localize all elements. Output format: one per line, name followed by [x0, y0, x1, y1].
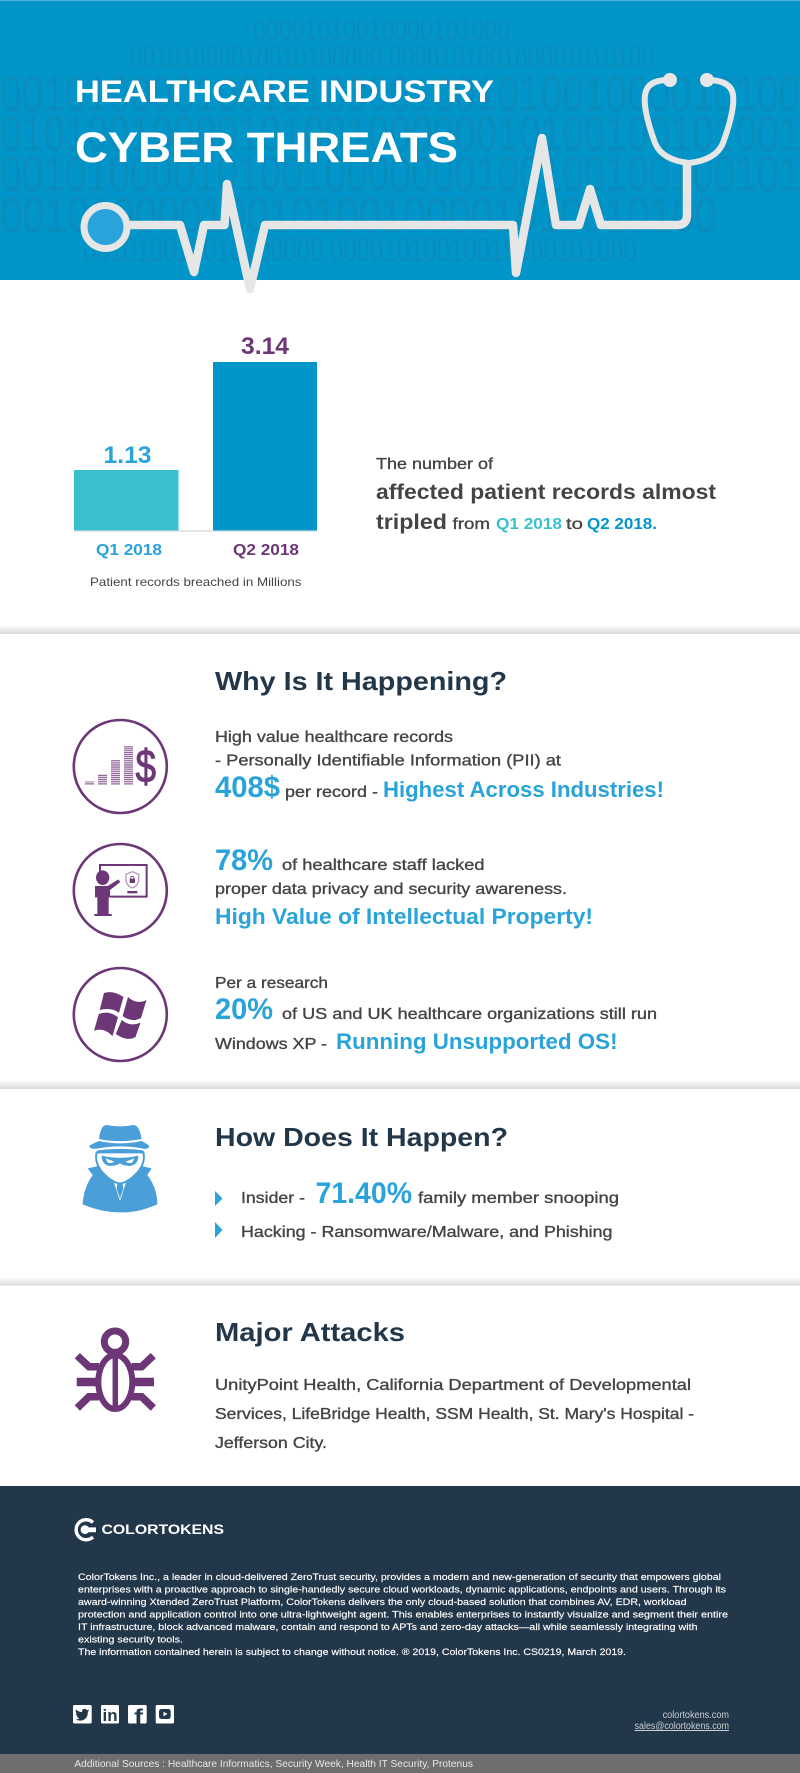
value: 1.13: 1.13	[104, 442, 152, 469]
attacks list text	[215, 1377, 694, 1452]
logo: colortokens	[76, 1520, 224, 1540]
icon: dollar value bars: $	[136, 740, 156, 792]
reason 1 text: Highest Across Industries!	[383, 777, 664, 802]
company description: enterprises with a proactive approach to single-handedly secure cloud workloads, dynamic applications, endpoints and users. Through its	[78, 1584, 726, 1595]
callout: records tripled: Q2 2018.	[587, 516, 657, 533]
logo: colortokens: COLORTOKENS	[102, 1522, 224, 1537]
panel: why is it happening	[74, 666, 664, 1061]
reason 3 text: 20%	[215, 993, 273, 1026]
heading: why is it happening: Why Is It Happening?	[215, 666, 507, 696]
icon: linkedin: in	[102, 1706, 118, 1725]
list: insider	[215, 1177, 619, 1210]
title: CYBER THREATS	[75, 124, 458, 172]
heading: major attacks: Major Attacks	[215, 1317, 405, 1347]
reason 1 text: High value healthcare records	[215, 729, 453, 746]
reason 3 text: of US and UK healthcare organizations still run	[282, 1006, 657, 1023]
icon: twitter	[73, 1705, 92, 1724]
heading: how does it happen: How Does It Happen?	[215, 1122, 508, 1152]
company description: protection and application control into one ultra-lightweight agent. This enables enterprises to instantly visualize and segment their entire	[78, 1609, 728, 1620]
attacks list text: Jefferson City.	[215, 1435, 327, 1452]
reason 3 text: Per a research	[215, 975, 328, 992]
binary background pattern: 00001010010000101000	[253, 14, 510, 47]
footer panel	[0, 1486, 800, 1754]
company description: ColorTokens Inc., a leader in cloud-delivered ZeroTrust security, provides a modern and new-generation of security that empowers global	[78, 1571, 721, 1582]
company description	[78, 1571, 728, 1657]
icon: bug	[77, 1331, 154, 1409]
reason 2 text: of healthcare staff lacked	[282, 857, 484, 874]
icon: spy	[83, 1125, 157, 1212]
binary background pattern	[0, 14, 800, 268]
reason 1 text: per record -	[285, 784, 378, 801]
contact details	[635, 1710, 729, 1732]
company description: IT infrastructure, block advanced malware, contain and respond to APTs and zero-day attacks—all while seamlessly integrating with	[78, 1621, 698, 1632]
reason 2 text	[215, 844, 593, 929]
label: Q2 2018: Q2 2018	[233, 542, 299, 559]
attacks list text: UnityPoint Health, California Department of Developmental	[215, 1377, 691, 1394]
icon: stethoscope heartbeat line	[84, 73, 733, 289]
icon: windows logo	[74, 968, 167, 1061]
icon: presenter at security board	[74, 844, 167, 937]
bar chart: patient records breached	[74, 333, 317, 589]
callout: records tripled: affected patient records almost	[376, 481, 716, 504]
list: insider: 71.40%	[316, 1177, 412, 1210]
title: HEALTHCARE INDUSTRY	[75, 73, 494, 109]
company description: award-winning Xtended ZeroTrust Platform, ColorTokens delivers the only cloud-based solution that combines AV, EDR, workload	[78, 1596, 686, 1607]
bar: Q2 2018	[213, 362, 317, 530]
list: insider: family member snooping	[418, 1190, 619, 1207]
chart caption: Patient records breached in Millions	[90, 575, 302, 589]
reason 3 text	[215, 975, 657, 1054]
panel: major attacks	[77, 1317, 694, 1452]
bar: Q1 2018	[74, 470, 178, 530]
callout: records tripled: tripled	[376, 511, 447, 534]
list: insider: Insider -	[241, 1190, 305, 1207]
reason 1 text: - Personally Identifiable Information (PII) at	[215, 752, 562, 770]
icon: youtube	[156, 1705, 174, 1724]
icon: facebook: f	[134, 1706, 143, 1728]
callout: records tripled	[376, 456, 716, 534]
list: hacking: Hacking - Ransomware/Malware, and Phishing	[241, 1224, 612, 1241]
company description: The information contained herein is subject to change without notice. ® 2019, ColorTokens Inc. CS0219, March 2019.	[78, 1646, 626, 1657]
reason 2 text: proper data privacy and security awareness.	[215, 881, 567, 898]
panel: how does it happen	[83, 1122, 619, 1241]
sources bar	[0, 1754, 800, 1773]
company description: existing security tools.	[78, 1634, 183, 1645]
reason 2 text: 78%	[215, 844, 273, 877]
callout: records tripled: from	[452, 516, 490, 533]
reason 3 text: Running Unsupported OS!	[336, 1029, 618, 1054]
title	[75, 73, 494, 172]
reason 1 text	[215, 729, 664, 804]
header banner	[0, 0, 800, 280]
reason 1 text: 408$	[215, 771, 280, 804]
callout: records tripled: The number of	[376, 456, 494, 473]
reason 3 text: Windows XP -	[215, 1036, 327, 1053]
label: Q1 2018: Q1 2018	[96, 542, 162, 559]
reason 2 text: High Value of Intellectual Property!	[215, 904, 593, 929]
sources bar: Additional Sources : Healthcare Informatics, Security Week, Health IT Security, Protenus	[74, 1758, 473, 1770]
icon: dollar value bars	[74, 720, 167, 813]
callout: records tripled: Q1 2018	[496, 516, 562, 533]
attacks list text: Services, LifeBridge Health, SSM Health, St. Mary's Hospital -	[215, 1406, 694, 1423]
value: 3.14: 3.14	[241, 333, 290, 360]
icon: facebook	[128, 1705, 147, 1728]
contact details: colortokens.com	[663, 1710, 729, 1721]
contact details: sales@colortokens.com	[635, 1721, 729, 1732]
callout: records tripled: to	[566, 516, 583, 533]
